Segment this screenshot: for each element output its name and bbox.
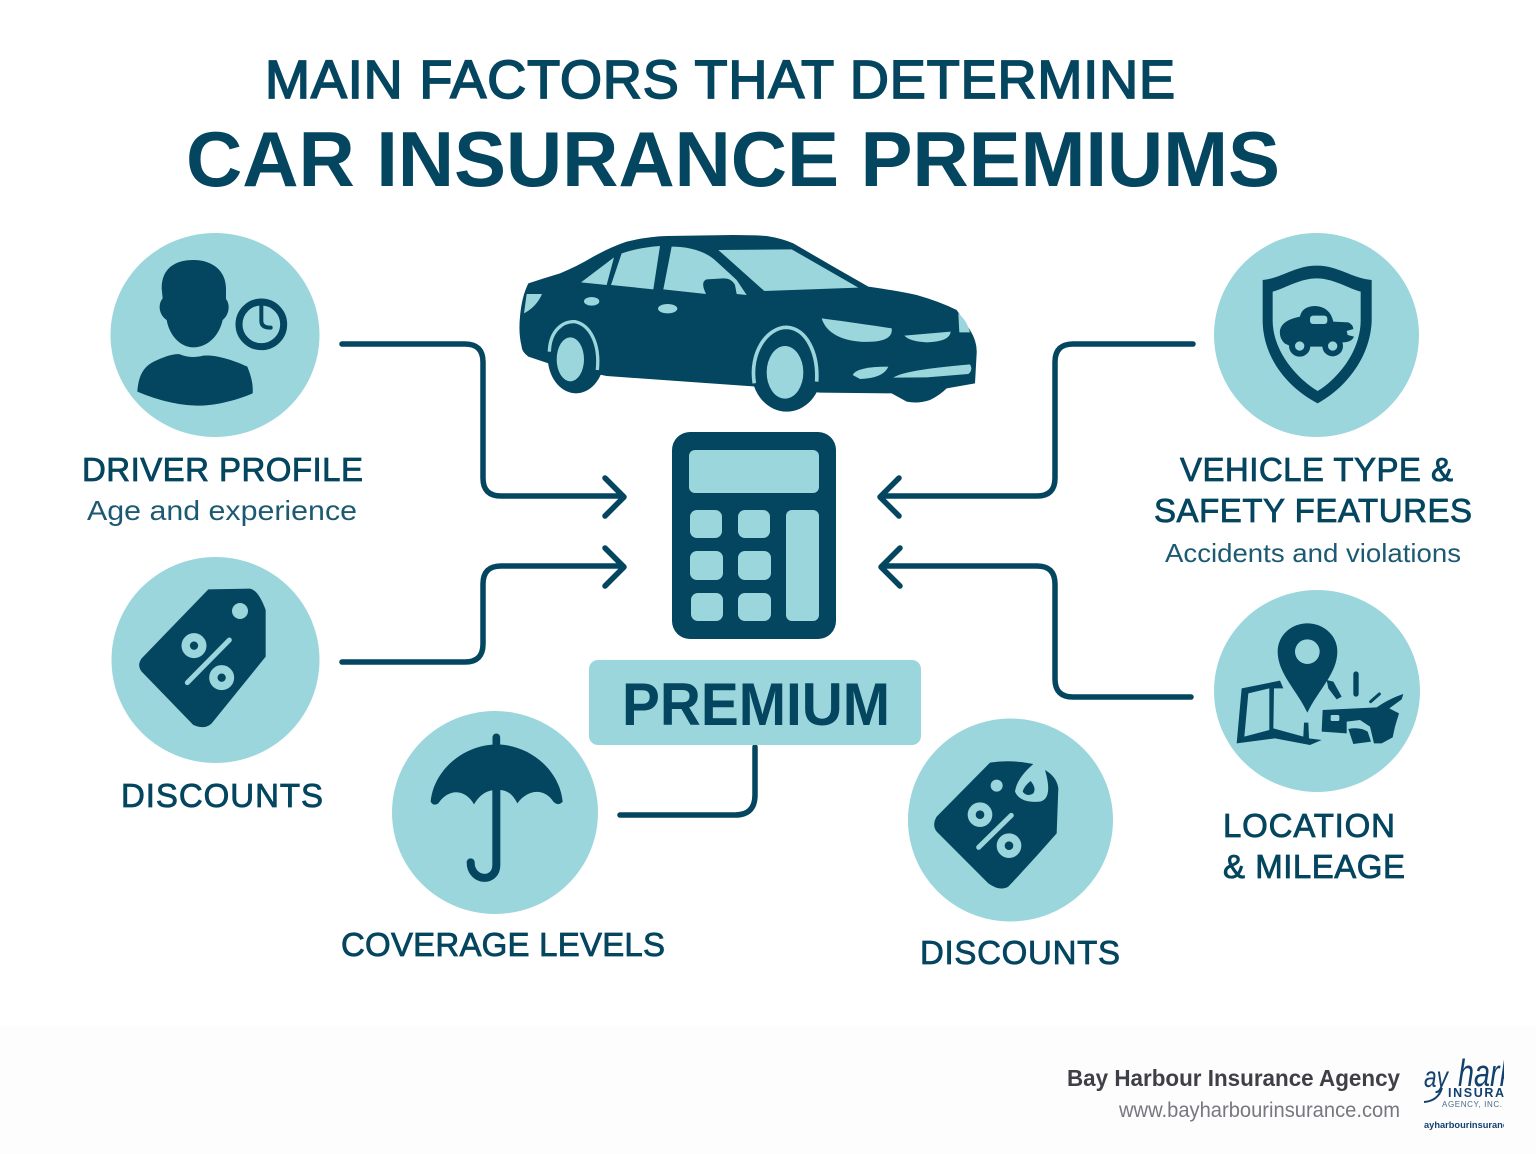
arrow: coverage levels to premium: [620, 747, 755, 815]
footer: agency logo: ay: [1424, 1061, 1450, 1094]
icon: percent tag: [139, 589, 266, 727]
label: discounts: DISCOUNTS: [121, 777, 323, 814]
icon: percent tag with loop: [934, 761, 1058, 889]
label: location and mileage: [1223, 807, 1405, 885]
panel: coverage levels: [341, 711, 665, 963]
title: [186, 50, 1280, 203]
panel: driver profile: [82, 233, 363, 526]
arrow: driver profile to calculator: [342, 344, 624, 516]
label: location and mileage: & MILEAGE: [1223, 848, 1405, 885]
footer: agency logo: AGENCY, INC.: [1442, 1100, 1502, 1109]
text: accidents and violations: Accidents and violations: [1165, 538, 1461, 568]
footer: agency logo: ayharbourinsuranc: [1424, 1120, 1508, 1131]
panel: location and mileage: [1214, 590, 1420, 885]
footer: agency name and website: Bay Harbour Insurance Agency: [1067, 1065, 1400, 1091]
label: vehicle type and safety features: [1154, 451, 1472, 529]
title: CAR INSURANCE PREMIUMS: [186, 115, 1280, 203]
label: driver profile: DRIVER PROFILE: [82, 451, 363, 488]
footer: agency logo: [1424, 1058, 1504, 1130]
footer: agency name and website: [1067, 1065, 1400, 1122]
icon: umbrella: [431, 737, 563, 878]
premium label: PREMIUM: [622, 671, 890, 738]
premium label: [589, 660, 921, 745]
panel: discounts right: [908, 718, 1120, 971]
label: coverage levels: COVERAGE LEVELS: [341, 926, 665, 963]
arrow: location to calculator: [881, 548, 1191, 697]
arrow: discounts to calculator: [342, 548, 624, 662]
label: discounts: DISCOUNTS: [920, 934, 1120, 971]
arrow: vehicle type to calculator: [880, 344, 1193, 516]
icon: driver with clock: [137, 260, 284, 406]
label: vehicle type and safety features: SAFETY FEATURES: [1154, 492, 1472, 529]
panel: discounts left: [112, 557, 323, 814]
footer: agency logo: hark: [1458, 1053, 1516, 1095]
icon: pin, map and crashed car: [1237, 623, 1403, 745]
label: vehicle type and safety features: VEHICLE TYPE &: [1180, 451, 1453, 488]
icon: calculator: [672, 432, 836, 639]
label: location and mileage: LOCATION: [1223, 807, 1395, 844]
title: MAIN FACTORS THAT DETERMINE: [265, 50, 1175, 110]
footer: agency name and website: www.bayharbourinsurance.com: [1118, 1099, 1400, 1122]
footer: agency logo: INSURA: [1448, 1086, 1504, 1100]
panel: vehicle type and safety: [1154, 233, 1472, 568]
icon: car: [519, 235, 977, 412]
icon: shield with car: [1263, 266, 1372, 403]
text: age and experience: Age and experience: [87, 495, 357, 526]
